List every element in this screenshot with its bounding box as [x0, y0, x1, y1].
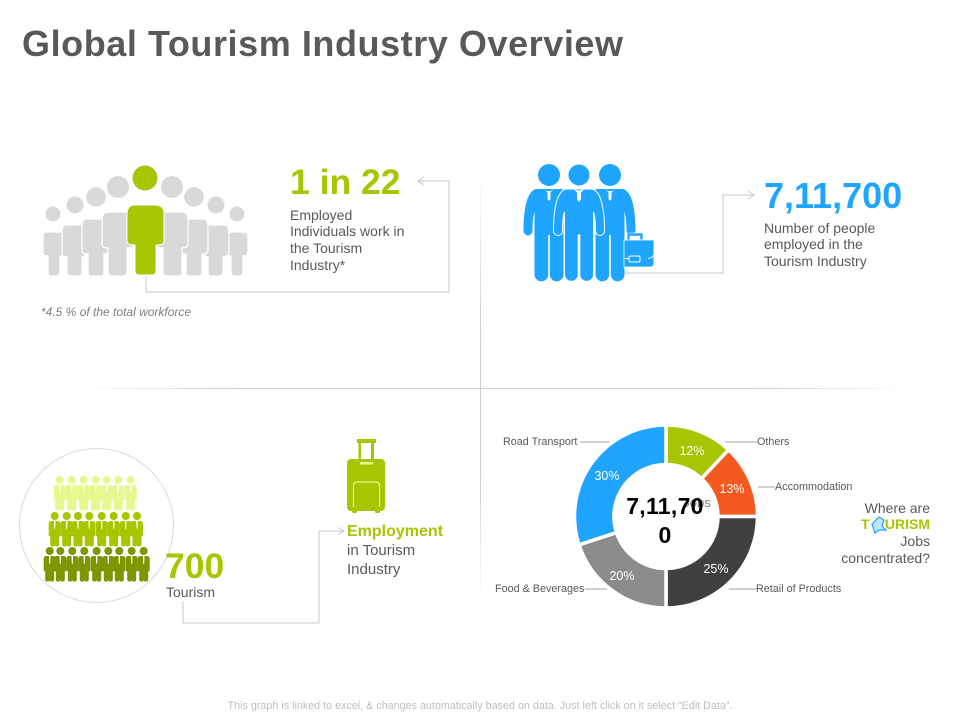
callout: where are tourism jobs concentrated: Where are: [865, 500, 930, 516]
text: employment in tourism industry: in Tourism: [347, 542, 415, 559]
text: number of people employed: Tourism Industry: [764, 253, 867, 269]
callout: where are tourism jobs concentrated: T: [861, 516, 870, 532]
slice labels: Road Transport: [503, 436, 577, 448]
text: employed individuals: Industry*: [290, 257, 346, 273]
donut percentage labels: [594, 444, 745, 583]
slice labels: Retail of Products: [756, 583, 842, 595]
quadrant divider: vertical: [480, 170, 481, 600]
callout: where are tourism jobs concentrated: Jobs: [900, 533, 930, 549]
statistic: 7,11,700: 7,11,700: [764, 175, 902, 216]
donut center value: 0: [658, 522, 672, 548]
panel: 700 tourism: [20, 439, 444, 623]
text: employment in tourism industry: Employment: [347, 523, 444, 540]
pictogram: bottom row: [44, 547, 150, 582]
quadrant divider: horizontal: [80, 388, 910, 389]
slice labels: Others: [757, 436, 790, 448]
donut percentage labels: 13%: [719, 482, 745, 496]
callout: where are tourism jobs concentrated: [841, 500, 930, 566]
slice labels: [495, 436, 852, 595]
statistic: 1 in 22: 1 in 22: [290, 162, 401, 202]
circle outline: [20, 448, 174, 602]
slice labels: Accommodation: [775, 481, 852, 493]
donut percentage labels: 12%: [679, 444, 705, 458]
donut chart segments: [575, 425, 758, 608]
footer note: This graph is linked to excel, & changes automatically based on data. Just left click on it select “Edit Data”.: [228, 700, 732, 712]
panel: people employed: [524, 164, 902, 281]
callout: where are tourism jobs concentrated: URISM: [885, 516, 930, 532]
pictogram: top row: [54, 476, 137, 510]
label: tourism: Tourism: [166, 584, 215, 600]
donut center label: Jobs: [683, 495, 711, 510]
connector arrow to employment: [183, 528, 344, 623]
icon: three business people with briefcase: [524, 164, 654, 281]
icon: luggage: [347, 439, 385, 513]
connector arrow to 1 in 22: [146, 177, 449, 292]
donut center value: 7,11,70: [626, 493, 704, 519]
icon: tourism globe: [872, 517, 886, 533]
text: employed individuals: Individuals work in: [290, 223, 404, 239]
donut percentage labels: 25%: [703, 562, 729, 576]
connector arrow to 7,11,700: [625, 191, 754, 273]
pictogram: middle row: [49, 512, 143, 546]
leader lines: [580, 442, 775, 589]
text: employed individuals: the Tourism: [290, 240, 362, 256]
text: employment in tourism industry: Industry: [347, 561, 401, 578]
panel: donut chart: [495, 425, 852, 608]
text: employed individuals: Employed: [290, 207, 352, 223]
text: number of people employed: employed in the: [764, 236, 863, 252]
statistic: 700: 700: [165, 546, 224, 586]
title: Global Tourism Industry Overview: [22, 23, 624, 64]
text: number of people employed: Number of people: [764, 220, 876, 236]
callout: where are tourism jobs concentrated: concentrated?: [841, 550, 930, 566]
icon: crowd with one highlighted person: [43, 166, 248, 276]
slice labels: Food & Beverages: [495, 583, 585, 595]
footnote: workforce: *4.5 % of the total workforce: [41, 305, 191, 319]
donut percentage labels: 30%: [594, 469, 620, 483]
panel: 1 in 22: [41, 162, 449, 319]
donut percentage labels: 20%: [609, 569, 635, 583]
